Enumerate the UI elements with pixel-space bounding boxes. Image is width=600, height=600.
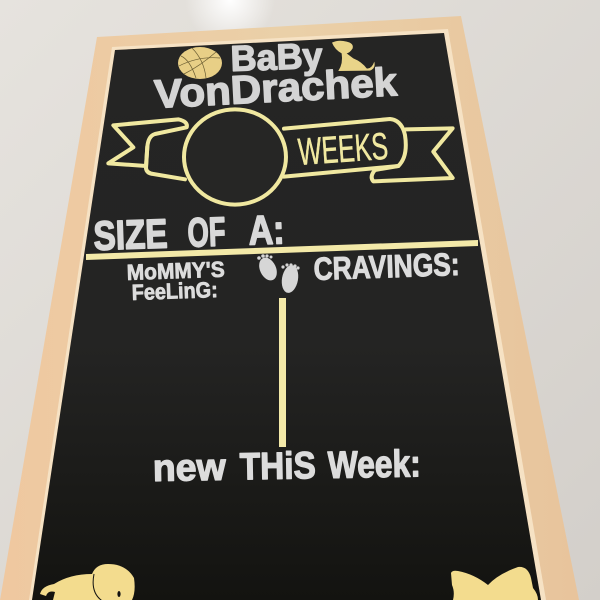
heading: size of a	[93, 206, 285, 259]
icon: dog	[332, 41, 375, 71]
heading: new this week: Week:	[327, 443, 421, 487]
icon: baby feet	[256, 254, 300, 294]
vertical divider	[279, 298, 286, 447]
heading: new this week: THiS	[239, 445, 316, 488]
icon: elephant	[40, 564, 135, 600]
heading: new this week	[152, 443, 421, 490]
label: mommy's feeling: MoMMY'S	[126, 257, 225, 285]
label: mommy's feeling: FeeLinG:	[131, 277, 218, 305]
banner main band	[284, 119, 406, 177]
banner left tail	[108, 119, 187, 166]
label: mommy's feeling	[126, 257, 225, 305]
title: Baby Vondrachek: VonDrachek	[153, 60, 399, 117]
icon: basketball	[178, 47, 222, 79]
heading: size of a: A:	[248, 206, 285, 254]
heading: new this week: new	[152, 447, 227, 490]
heading: size of a: OF	[187, 208, 226, 256]
label: cravings: CRAVINGS:	[313, 246, 460, 287]
label: weeks: WEEKS	[297, 126, 389, 174]
week number circle	[184, 109, 286, 205]
banner left fold	[146, 147, 185, 179]
title: Baby Vondrachek: BaBy	[230, 35, 323, 79]
title: Baby Vondrachek	[153, 35, 399, 117]
banner right tail	[372, 128, 453, 181]
heading: size of a: SIZE	[93, 210, 168, 259]
icon: bow	[451, 567, 538, 600]
horizontal divider	[86, 240, 478, 260]
banner with circle	[108, 109, 453, 205]
